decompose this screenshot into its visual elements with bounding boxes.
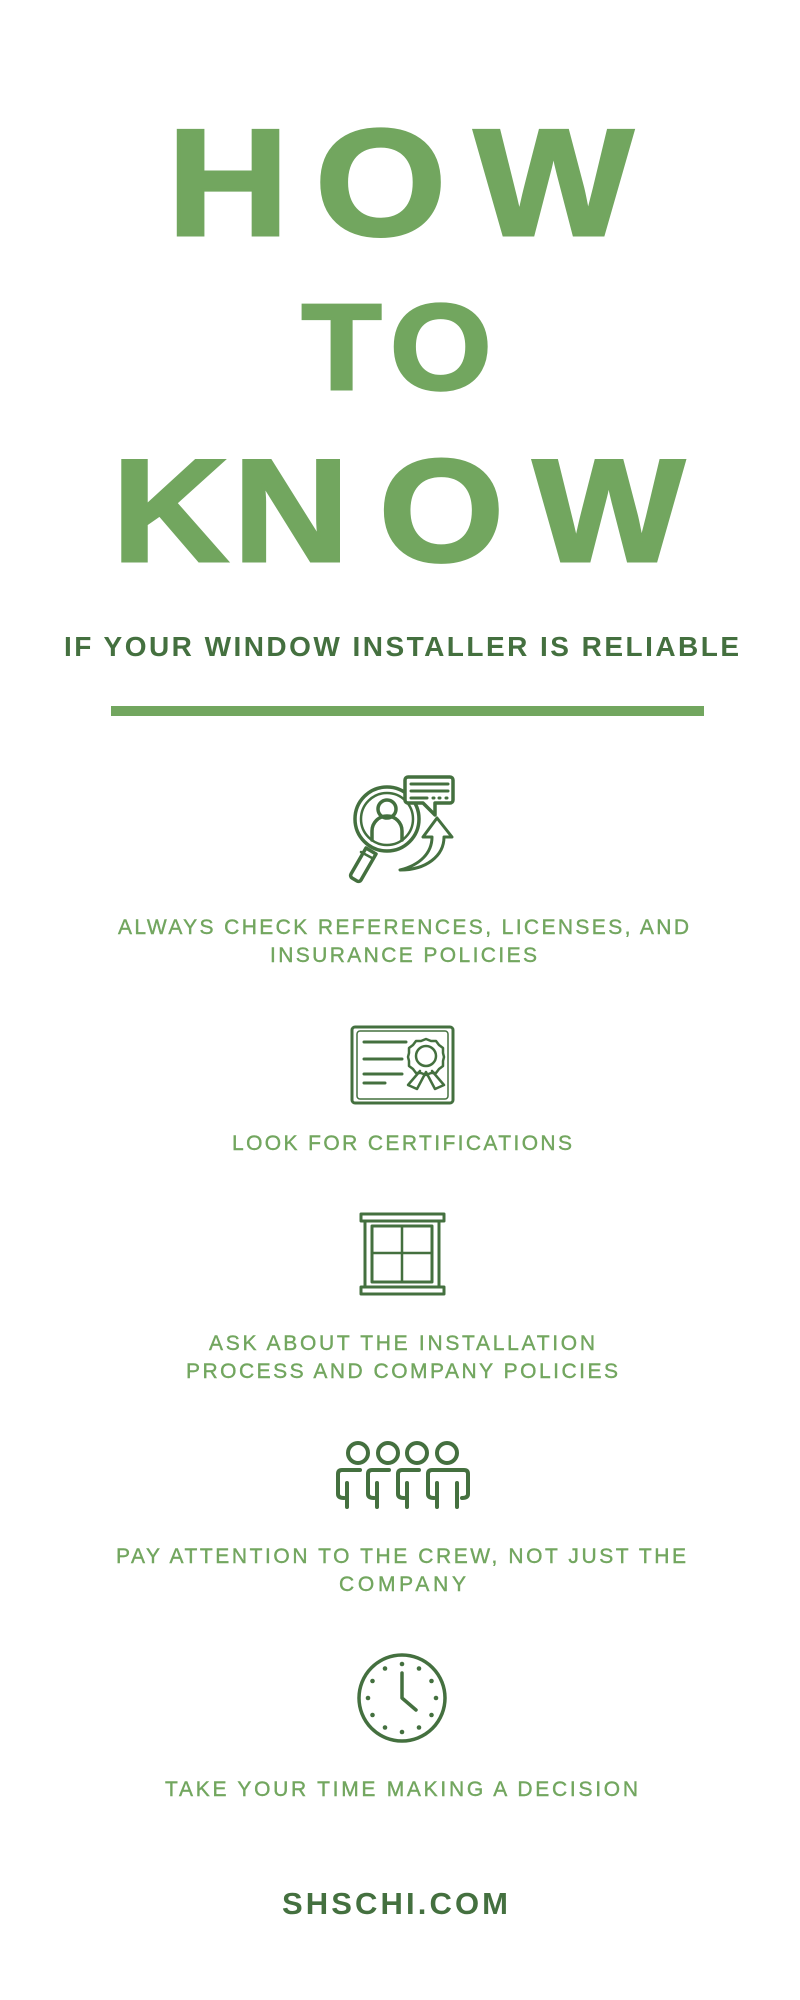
item 2: certifications [232,1027,572,1155]
caption 3 [186,1332,618,1383]
icon: clock [359,1655,445,1741]
caption 3: PROCESS AND COMPANY POLICIES [186,1360,618,1383]
item 1: references [118,777,689,967]
subtitle: IF YOUR WINDOW INSTALLER IS RELIABLE [64,631,739,662]
caption 4: COMPANY [339,1573,466,1596]
footer website: SHSCHI.COM [282,1886,508,1921]
item 5: take your time [165,1655,638,1801]
icon: magnifier with person, speech bubble and arrow [351,777,453,881]
caption 1: ALWAYS CHECK REFERENCES, LICENSES, AND [118,916,689,939]
icon: four people [338,1443,468,1507]
item 4: crew [116,1443,686,1596]
caption 3: ASK ABOUT THE INSTALLATION [209,1332,595,1355]
title line: TO: TO [302,279,492,415]
caption 4 [116,1545,686,1596]
icon: certificate [352,1027,453,1103]
title [112,99,685,592]
item 3: installation process [186,1214,618,1383]
title line: KNOW: KNOW [112,429,685,592]
divider bar [111,706,704,716]
caption 1 [118,916,689,967]
title line: HOW: HOW [167,99,634,268]
caption 2: LOOK FOR CERTIFICATIONS [232,1132,572,1155]
caption 5: TAKE YOUR TIME MAKING A DECISION [165,1778,638,1801]
icon: window [361,1214,444,1294]
caption 4: PAY ATTENTION TO THE CREW, NOT JUST THE [116,1545,686,1568]
caption 1: INSURANCE POLICIES [270,944,537,967]
